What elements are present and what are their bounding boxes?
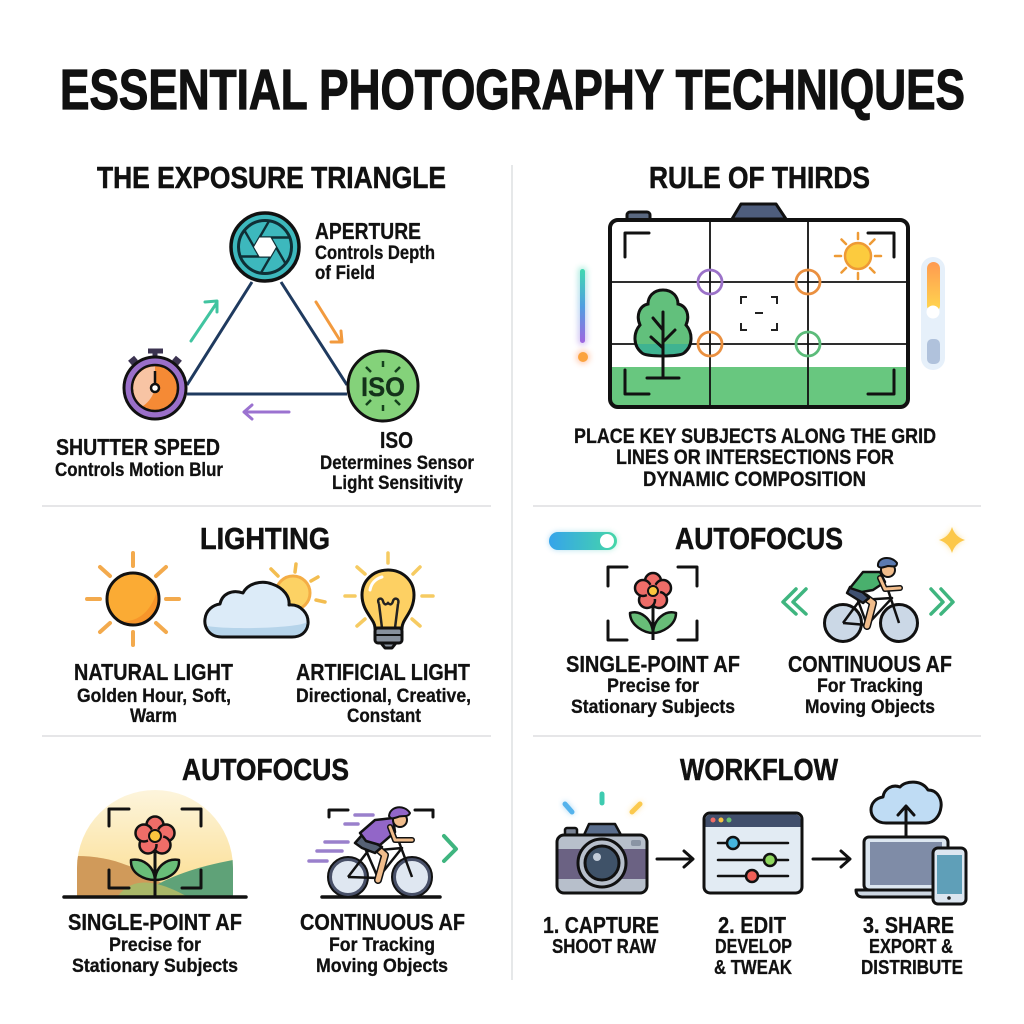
label: continuous af: For Tracking bbox=[329, 935, 435, 956]
icon: stopwatch bbox=[124, 351, 186, 419]
label: edit: DEVELOP bbox=[715, 936, 792, 958]
icon: light bulb bbox=[345, 553, 433, 648]
label: share: EXPORT & bbox=[869, 936, 953, 958]
label: natural light bbox=[74, 659, 233, 727]
intersection rings bbox=[698, 270, 820, 356]
label: single-point af bbox=[68, 909, 242, 977]
heading: autofocus: AUTOFOCUS bbox=[182, 752, 349, 787]
arrow: aperture to iso bbox=[316, 302, 342, 342]
label: shutter speed: Controls Motion Blur bbox=[55, 460, 224, 481]
label: aperture: APERTURE bbox=[315, 218, 421, 244]
label: iso: ISO bbox=[380, 427, 413, 453]
icon: flower in focus brackets bbox=[608, 567, 697, 640]
caption: LINES OR INTERSECTIONS FOR bbox=[616, 446, 894, 469]
arrow: iso to shutter bbox=[244, 405, 289, 419]
label: single-point af: SINGLE-POINT AF bbox=[566, 651, 740, 677]
icon: chevrons right bbox=[931, 589, 953, 614]
icon: iso: ISO bbox=[361, 372, 405, 402]
icon: sparkle bbox=[939, 527, 965, 553]
label: continuous af: Moving Objects bbox=[316, 956, 448, 977]
label: natural light: NATURAL LIGHT bbox=[74, 659, 233, 685]
icon: flower landscape bbox=[64, 785, 246, 900]
viewfinder grid bbox=[610, 220, 908, 407]
icon: cloud with sun bbox=[205, 564, 325, 637]
icon: cloud laptop and phone bbox=[856, 782, 966, 904]
label: shutter speed bbox=[55, 434, 224, 481]
label: capture bbox=[543, 912, 659, 958]
focus brackets bbox=[741, 297, 777, 330]
heading: the exposure triangle: THE EXPOSURE TRIANGLE bbox=[97, 160, 446, 195]
label: artificial light: Constant bbox=[347, 706, 422, 727]
arrow: edit to share bbox=[813, 851, 850, 867]
label: edit: & TWEAK bbox=[714, 957, 792, 979]
icon: chevrons left bbox=[783, 589, 806, 614]
label: continuous af: CONTINUOUS AF bbox=[300, 909, 465, 935]
label: share: DISTRIBUTE bbox=[861, 957, 963, 979]
icon: tree bbox=[635, 290, 691, 378]
label: single-point af: Stationary Subjects bbox=[72, 956, 238, 977]
heading: rule of thirds: RULE OF THIRDS bbox=[649, 160, 870, 195]
label: continuous af bbox=[788, 651, 952, 718]
heading: autofocus: AUTOFOCUS bbox=[675, 521, 843, 556]
icon: natural sun bbox=[87, 553, 179, 645]
label: aperture bbox=[315, 218, 435, 284]
label: single-point af bbox=[566, 651, 740, 718]
label: single-point af: Precise for bbox=[607, 676, 700, 697]
panel: workflow bbox=[543, 752, 966, 979]
label: iso: Light Sensitivity bbox=[332, 473, 463, 494]
icon: chevron right bbox=[444, 836, 456, 861]
caption: PLACE KEY SUBJECTS ALONG THE GRID bbox=[574, 425, 936, 448]
label: single-point af: SINGLE-POINT AF bbox=[68, 909, 242, 935]
label: capture: 1. CAPTURE bbox=[543, 912, 659, 938]
panel: rule of thirds bbox=[574, 160, 945, 491]
heading: workflow: WORKFLOW bbox=[680, 752, 839, 787]
label: share bbox=[861, 912, 963, 979]
label: capture: SHOOT RAW bbox=[552, 936, 656, 958]
label: continuous af bbox=[300, 909, 465, 977]
icon: iso bbox=[348, 351, 418, 421]
label: continuous af: CONTINUOUS AF bbox=[788, 651, 952, 677]
panel: lighting bbox=[74, 521, 471, 727]
caption bbox=[574, 425, 936, 491]
label: aperture: of Field bbox=[315, 263, 375, 284]
label: continuous af: Moving Objects bbox=[805, 697, 935, 718]
label: natural light: Golden Hour, Soft, bbox=[77, 686, 231, 707]
icon: sun bbox=[835, 233, 881, 279]
icon: cyclist green bbox=[824, 558, 918, 642]
label: share: 3. SHARE bbox=[863, 912, 954, 938]
label: artificial light: ARTIFICIAL LIGHT bbox=[296, 659, 470, 685]
slider bbox=[921, 257, 945, 370]
panel: exposure triangle bbox=[55, 160, 475, 494]
arrow: shutter to aperture bbox=[191, 301, 217, 341]
arrow: capture to edit bbox=[657, 851, 693, 867]
panel: autofocus right bbox=[549, 521, 965, 718]
icon: cyclist purple bbox=[309, 807, 440, 897]
label: shutter speed: SHUTTER SPEED bbox=[56, 434, 220, 460]
label: single-point af: Stationary Subjects bbox=[571, 697, 735, 718]
triangle lines bbox=[187, 282, 347, 394]
exposure meter bar bbox=[576, 267, 590, 364]
panel: autofocus left bbox=[64, 752, 465, 977]
label: natural light: Warm bbox=[130, 706, 177, 727]
icon: camera bbox=[557, 794, 647, 893]
center column divider bbox=[42, 165, 981, 980]
label: edit bbox=[714, 912, 792, 979]
label: artificial light: Directional, Creative, bbox=[296, 686, 471, 707]
label: continuous af: For Tracking bbox=[817, 676, 923, 697]
label: iso: Determines Sensor bbox=[320, 453, 475, 474]
icon: aperture bbox=[231, 213, 299, 281]
label: single-point af: Precise for bbox=[109, 935, 202, 956]
icon: camera prism and button bbox=[627, 204, 786, 221]
caption: DYNAMIC COMPOSITION bbox=[643, 468, 866, 491]
label: iso bbox=[320, 427, 475, 494]
heading: lighting: LIGHTING bbox=[200, 521, 330, 556]
label: artificial light bbox=[296, 659, 471, 727]
icon: toggle bbox=[549, 532, 617, 550]
icon: editing window bbox=[704, 813, 802, 893]
label: edit: 2. EDIT bbox=[718, 912, 786, 938]
label: aperture: Controls Depth bbox=[315, 243, 435, 264]
